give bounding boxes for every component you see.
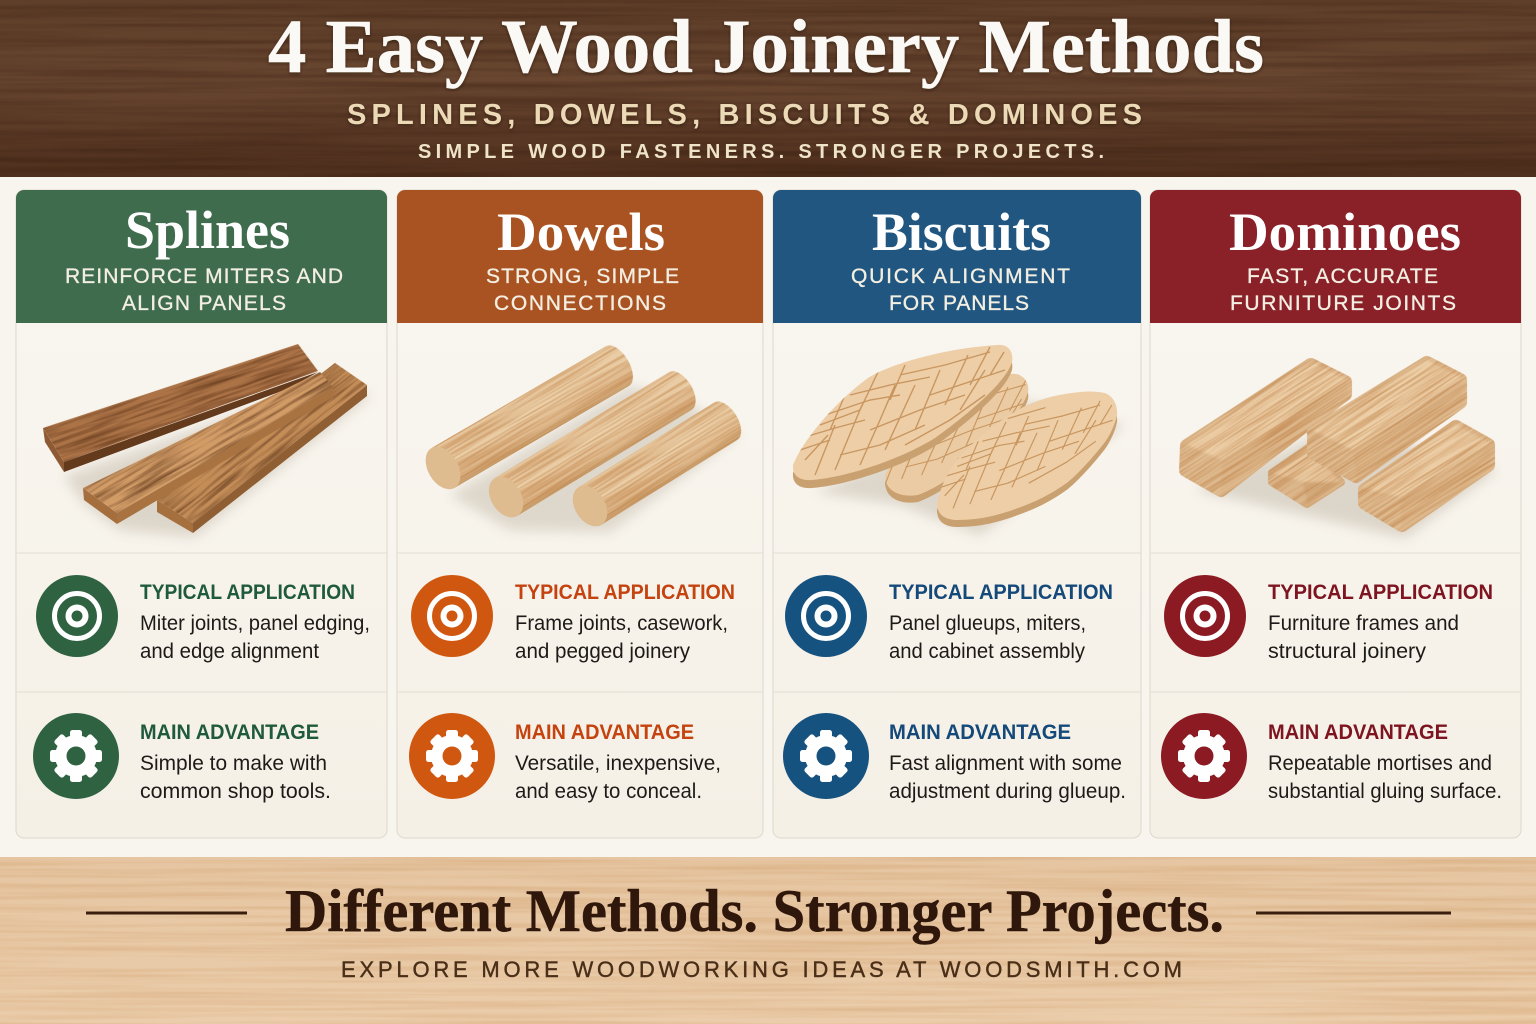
illustration: dominoes xyxy=(1125,288,1536,585)
panel: biscuits xyxy=(773,190,1141,838)
main advantage text: MAIN ADVANTAGE xyxy=(1268,721,1448,744)
typical application text xyxy=(1268,581,1493,663)
main advantage text: common shop tools. xyxy=(140,780,331,803)
typical application text: TYPICAL APPLICATION xyxy=(889,581,1113,604)
main advantage text: MAIN ADVANTAGE xyxy=(889,721,1071,744)
biscuit 2 xyxy=(885,374,1028,503)
panel: splines xyxy=(7,190,445,838)
typical application text: Panel glueups, miters, xyxy=(889,612,1086,635)
title: 4 Easy Wood Joinery Methods xyxy=(268,5,1264,89)
icon: target xyxy=(1164,575,1246,657)
typical application text: and edge alignment xyxy=(140,640,319,663)
plank 2 xyxy=(22,264,394,621)
biscuits subheading: QUICK ALIGNMENT xyxy=(851,265,1070,288)
icon: gear xyxy=(33,713,119,799)
typical application text xyxy=(140,581,370,663)
main advantage text xyxy=(1268,721,1502,803)
dowel 1 xyxy=(418,340,639,495)
icon: target xyxy=(785,575,867,657)
biscuit 3 xyxy=(937,392,1117,527)
footer call to action: EXPLORE MORE WOODWORKING IDEAS AT WOODSMITH.COM xyxy=(341,957,1182,982)
subtitle: SPLINES, DOWELS, BISCUITS & DOMINOES xyxy=(347,99,1142,131)
plank 1 xyxy=(7,259,354,547)
domino left xyxy=(1125,288,1407,567)
splines subheading: ALIGN PANELS xyxy=(122,292,286,315)
icon: gear xyxy=(1161,713,1247,799)
dowels heading: Dowels xyxy=(497,202,665,262)
illustration: dowels xyxy=(418,340,748,533)
main advantage text: Repeatable mortises and xyxy=(1268,752,1492,775)
biscuits subheading xyxy=(851,265,1070,315)
typical application text: Miter joints, panel edging, xyxy=(140,612,370,635)
main advantage text xyxy=(140,721,331,803)
footer headline: Different Methods. Stronger Projects. xyxy=(285,878,1224,944)
splines heading: Splines xyxy=(125,200,290,260)
biscuits header xyxy=(773,190,1141,323)
domino top xyxy=(1258,291,1516,547)
header band: wood xyxy=(0,0,1536,177)
dowels subheading: CONNECTIONS xyxy=(494,292,666,315)
typical application text: structural joinery xyxy=(1268,640,1427,663)
typical application text xyxy=(515,581,735,663)
dominoes heading: Dominoes xyxy=(1229,202,1461,262)
dominoes subheading: FAST, ACCURATE xyxy=(1247,265,1438,288)
main advantage text: MAIN ADVANTAGE xyxy=(140,721,319,744)
dominoes subheading xyxy=(1230,265,1456,315)
icon: gear xyxy=(409,713,495,799)
main advantage text: Simple to make with xyxy=(140,752,327,775)
footer band: light wood xyxy=(0,857,1536,1024)
dowel 3 xyxy=(566,396,748,533)
illustration: splines xyxy=(7,259,445,625)
typical application text: TYPICAL APPLICATION xyxy=(515,581,735,604)
domino right xyxy=(1316,366,1536,585)
plank 3 xyxy=(79,261,445,625)
biscuits heading: Biscuits xyxy=(872,202,1051,262)
splines header xyxy=(16,190,387,323)
domino small xyxy=(1246,416,1367,536)
main advantage text: MAIN ADVANTAGE xyxy=(515,721,694,744)
typical application text: and pegged joinery xyxy=(515,640,690,663)
dominoes subheading: FURNITURE JOINTS xyxy=(1230,292,1456,315)
illustration: biscuits xyxy=(793,345,1125,535)
panel: dominoes xyxy=(1125,190,1536,838)
typical application text xyxy=(889,581,1113,663)
icon: gear xyxy=(783,713,869,799)
tagline: SIMPLE WOOD FASTENERS. STRONGER PROJECTS. xyxy=(418,141,1104,163)
splines subheading xyxy=(65,265,343,315)
biscuit 1 xyxy=(793,345,1012,488)
main advantage text: and easy to conceal. xyxy=(515,780,702,803)
typical application text: Frame joints, casework, xyxy=(515,612,728,635)
biscuits subheading: FOR PANELS xyxy=(889,292,1029,315)
panel: dowels xyxy=(397,190,763,838)
dowels subheading xyxy=(486,265,679,315)
icon: target xyxy=(411,575,493,657)
typical application text: Furniture frames and xyxy=(1268,612,1459,635)
main advantage text xyxy=(515,721,721,803)
main advantage text: adjustment during glueup. xyxy=(889,780,1126,803)
typical application text: TYPICAL APPLICATION xyxy=(140,581,355,604)
icon: target xyxy=(36,575,118,657)
main advantage text: Fast alignment with some xyxy=(889,752,1122,775)
dowels header xyxy=(397,190,763,323)
typical application text: TYPICAL APPLICATION xyxy=(1268,581,1493,604)
dowel 2 xyxy=(482,366,702,524)
dowels subheading: STRONG, SIMPLE xyxy=(486,265,679,288)
splines subheading: REINFORCE MITERS AND xyxy=(65,265,343,288)
main advantage text: Versatile, inexpensive, xyxy=(515,752,721,775)
main advantage text xyxy=(889,721,1126,803)
typical application text: and cabinet assembly xyxy=(889,640,1085,663)
main advantage text: substantial gluing surface. xyxy=(1268,780,1502,803)
dominoes header xyxy=(1150,190,1521,323)
